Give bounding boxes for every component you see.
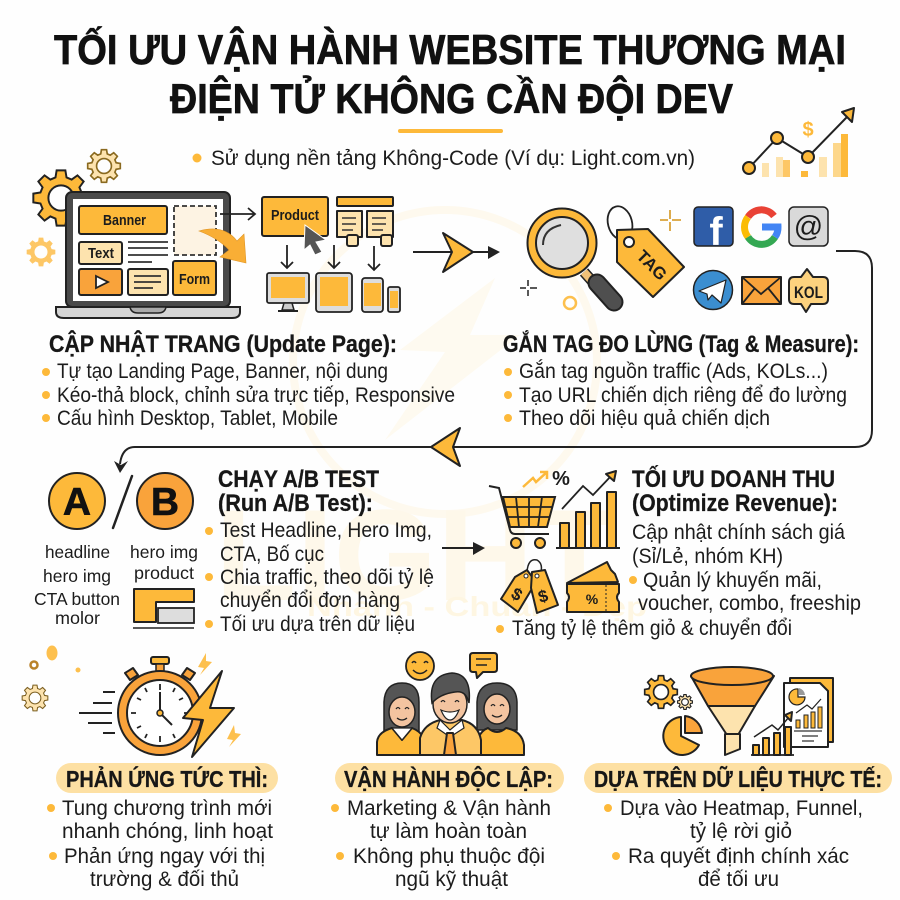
panel: independent operation xyxy=(331,763,564,891)
icon: gears xyxy=(27,150,120,266)
panel: A/B test text: Tối ưu dựa trên dữ liệu xyxy=(220,613,415,636)
panel: A/B test text: (Run A/B Test): xyxy=(218,490,373,517)
block layout xyxy=(337,197,393,246)
variant A labels: hero img xyxy=(43,566,111,586)
person: man xyxy=(420,673,481,755)
arrow: to product xyxy=(220,208,255,220)
panel: revenue illustration xyxy=(489,468,620,613)
person: right woman xyxy=(477,683,524,755)
icon: voucher xyxy=(567,562,619,612)
icon: price tags: $ xyxy=(508,584,526,605)
icon: price tag: TAG xyxy=(633,246,671,284)
panel: revenue text: voucher, combo, freeship xyxy=(638,592,861,615)
watermark: Light logo: Nhanh - Chuẩn - Đẹp xyxy=(307,591,647,622)
icon: Google xyxy=(744,210,778,244)
panel: tag and measure text: Tạo URL chiến dịch riêng để đo lường xyxy=(519,384,847,407)
decor: small gear and dots xyxy=(22,646,81,711)
product block xyxy=(262,197,328,236)
arrow: update to tag xyxy=(413,233,500,272)
variant A labels: molor xyxy=(55,608,100,628)
icon: mail xyxy=(742,277,781,304)
icon: KOL badge xyxy=(789,269,828,312)
panel: real data based: Ra quyết định chính xác xyxy=(628,845,849,868)
icon: devices xyxy=(267,273,400,312)
panel: independent operation: Marketing & Vận hành xyxy=(347,797,551,820)
icon: cursor xyxy=(304,225,326,255)
panel: tag and measure text: Gắn tag nguồn traffic (Ads, KOLs...) xyxy=(519,360,828,383)
icon: price tags: $ xyxy=(536,586,551,607)
title underline xyxy=(398,129,503,133)
panel: real data based: tỷ lệ rời giỏ xyxy=(690,820,792,843)
icon: price tag xyxy=(604,203,684,297)
panel: instant reaction: trường & đối thủ xyxy=(90,868,239,891)
icon: at sign: @ xyxy=(794,211,823,243)
icon: price tags xyxy=(501,560,558,613)
variant A labels: headline xyxy=(45,542,110,562)
icon: speech bubble xyxy=(470,653,497,678)
panel: revenue text xyxy=(496,465,861,640)
icon: bar chart xyxy=(556,471,620,548)
pill heading: VẬN HÀNH ĐỘC LẬP: xyxy=(344,765,553,792)
icon: laptop: Banner xyxy=(103,212,146,229)
divider slash xyxy=(113,476,132,528)
product block: Product xyxy=(271,207,319,224)
panel: A/B test text: CHẠY A/B TEST xyxy=(218,466,379,493)
panel: real data based: Dựa vào Heatmap, Funnel, xyxy=(620,797,863,820)
icon: smiley xyxy=(406,652,434,680)
panel: instant reaction: nhanh chóng, linh hoạt xyxy=(62,820,273,843)
panel: instant reaction xyxy=(47,763,278,891)
panel: revenue text: Tăng tỷ lệ thêm giỏ & chuyển đổi xyxy=(512,617,792,640)
panel: update page text: Kéo-thả block, chỉnh sửa trực tiếp, Responsive xyxy=(57,384,455,407)
panel: A/B illustration xyxy=(34,473,198,628)
icon: variant B: B xyxy=(151,481,179,524)
panel: instant reaction: Tung chương trình mới xyxy=(62,797,272,820)
icon: variant A xyxy=(49,473,105,529)
icon: report document xyxy=(784,678,833,747)
icon: KOL badge: KOL xyxy=(794,283,823,302)
icon: at sign xyxy=(789,207,828,246)
icon: team of three xyxy=(377,652,524,755)
icon: small trend arrow and percent xyxy=(523,468,570,490)
icon: growth bars xyxy=(751,712,794,755)
panel: revenue text: Cập nhật chính sách giá xyxy=(632,521,845,544)
variant B labels: product xyxy=(134,563,194,583)
variant A labels: CTA button xyxy=(34,589,120,609)
arrows: to devices xyxy=(281,245,380,270)
panel: independent operation: Không phụ thuộc đội xyxy=(353,845,545,868)
icon: stopwatch with lightning xyxy=(79,653,241,757)
variant B labels xyxy=(130,542,198,583)
variant B labels: hero img xyxy=(130,542,198,562)
icon: funnel with reports xyxy=(645,667,833,755)
panel: revenue text: TỐI ƯU DOANH THU xyxy=(632,465,835,493)
panel: update page text xyxy=(42,330,455,430)
icon: Telegram xyxy=(694,270,732,310)
arrow: A/B to revenue xyxy=(442,542,485,555)
icon: laptop: Text xyxy=(88,245,114,262)
variant A labels xyxy=(34,542,120,628)
icon: growth chart xyxy=(743,108,854,177)
icon: laptop xyxy=(56,192,240,318)
arrow: tag to A/B test xyxy=(114,251,872,473)
pill heading: PHẢN ỨNG TỨC THÌ: xyxy=(66,764,268,792)
panel: tag and measure text xyxy=(503,330,859,430)
panel: real data based xyxy=(584,763,892,891)
panel: A/B test text: chuyển đổi đơn hàng xyxy=(220,589,400,612)
icon: sparkles xyxy=(520,210,681,309)
watermark: Light logo: LIGHT xyxy=(215,482,615,628)
person: left woman xyxy=(377,683,424,755)
panel: update page text: Tự tạo Landing Page, Banner, nội dung xyxy=(57,360,388,383)
icon: Facebook: f xyxy=(709,210,723,254)
panel: A/B test text: Test Headline, Hero Img, xyxy=(220,519,432,542)
panel: A/B test text: CTA, Bố cục xyxy=(220,543,324,566)
icon: Facebook xyxy=(694,207,733,254)
icon: magnifier xyxy=(528,208,614,302)
panel: update page text: Cấu hình Desktop, Tablet, Mobile xyxy=(57,407,338,430)
icon: layout wireframe xyxy=(133,589,194,628)
panel: instant reaction: Phản ứng ngay với thị xyxy=(64,845,265,868)
panel: update page text: CẬP NHẬT TRANG (Update Page): xyxy=(49,330,397,358)
panel: independent operation: tự làm hoàn toàn xyxy=(370,820,527,843)
panel: tag illustration xyxy=(520,203,828,312)
panel: revenue text: (Optimize Revenue): xyxy=(632,490,838,517)
panel: tag and measure text: Theo dõi hiệu quả chiến dịch xyxy=(519,407,770,430)
icon: cart xyxy=(489,486,555,548)
panel: revenue text: Quản lý khuyến mãi, xyxy=(643,569,822,592)
icon: variant B xyxy=(137,473,193,529)
icon: funnel xyxy=(691,667,774,755)
panel: independent operation: ngũ kỹ thuật xyxy=(395,868,508,891)
panel: A/B test text: Chia traffic, theo dõi tỷ lệ xyxy=(220,566,434,589)
icon: small trend arrow and percent: % xyxy=(552,468,570,490)
arrow: drag block xyxy=(199,229,246,263)
panel: real data based: để tối ưu xyxy=(698,868,779,891)
panel: A/B test text xyxy=(205,466,434,636)
icon: variant A: A xyxy=(63,481,91,524)
icon: pie chart xyxy=(663,716,702,755)
icon: growth chart: $ xyxy=(802,119,814,141)
icon: voucher: % xyxy=(586,591,599,607)
icon: laptop: Form xyxy=(179,271,210,288)
title xyxy=(54,25,846,122)
panel: revenue text: (Sỉ/Lẻ, nhóm KH) xyxy=(632,545,783,568)
icon: gears xyxy=(645,676,692,709)
watermark: Light logo xyxy=(215,210,647,628)
title: ĐIỆN TỬ KHÔNG CẦN ĐỘI DEV xyxy=(170,74,733,122)
panel: update page illustration xyxy=(27,150,400,318)
subtitle: Sử dụng nền tảng Không-Code (Ví dụ: Light.com.vn) xyxy=(211,147,695,170)
